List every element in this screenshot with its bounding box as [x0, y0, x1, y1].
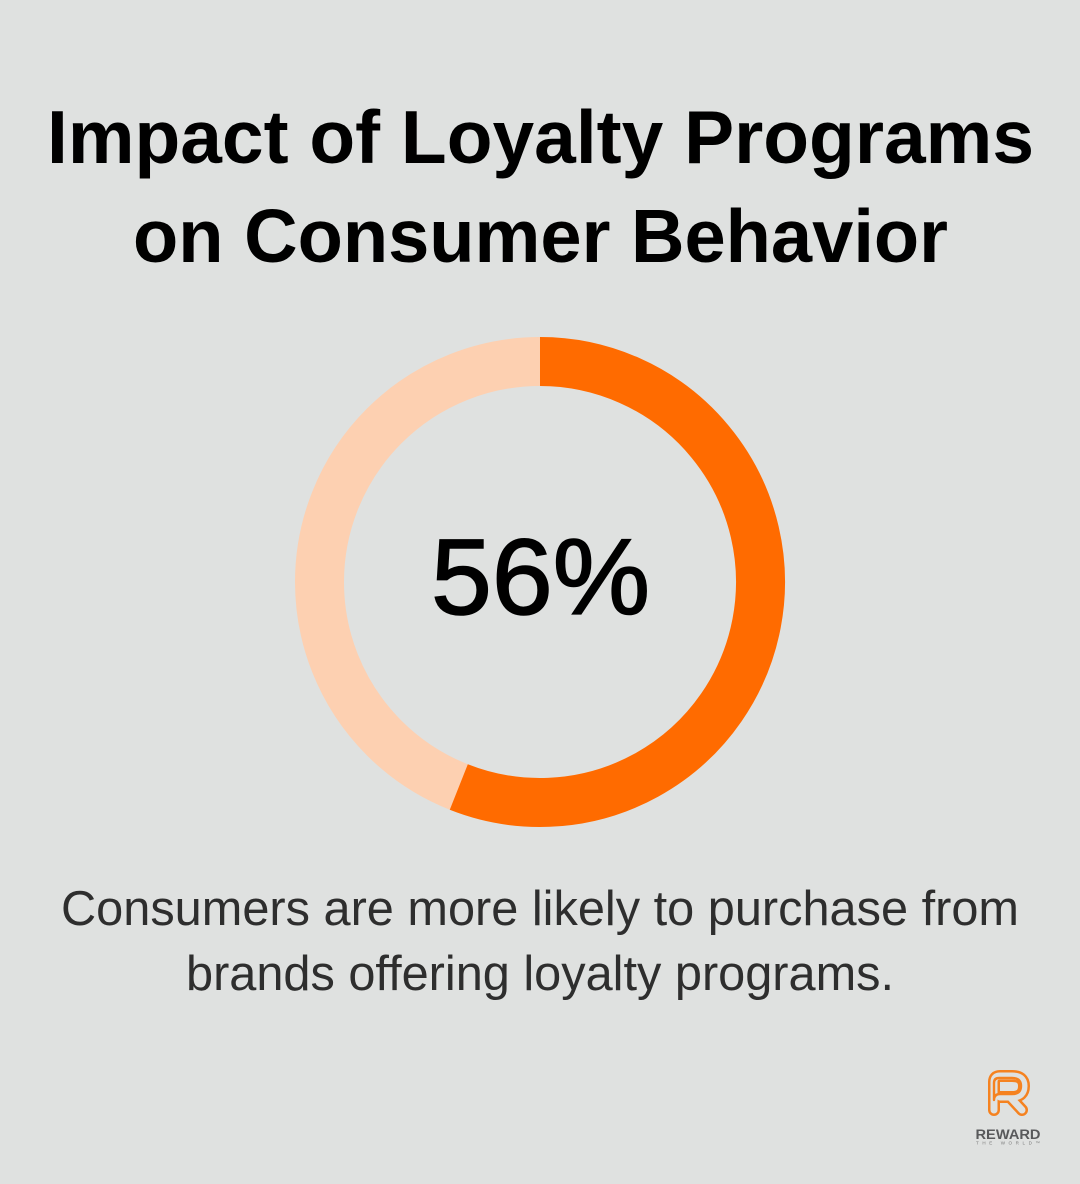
title: on Consumer Behavior: [133, 194, 948, 278]
title: Impact of Loyalty Programs: [47, 95, 1034, 179]
donut value: 56%: [431, 516, 650, 637]
title: [47, 95, 1034, 278]
caption: Consumers are more likely to purchase from: [61, 882, 1019, 936]
caption: [61, 882, 1019, 1001]
caption: brands offering loyalty programs.: [186, 947, 894, 1001]
icon: orange R mark: [994, 1076, 1024, 1110]
logo tagline: THE WORLD™: [976, 1140, 1040, 1146]
logo wordmark: REWARD: [976, 1127, 1041, 1142]
donut chart: 56%: [320, 362, 761, 802]
logo: Reward the World: [976, 1076, 1041, 1146]
